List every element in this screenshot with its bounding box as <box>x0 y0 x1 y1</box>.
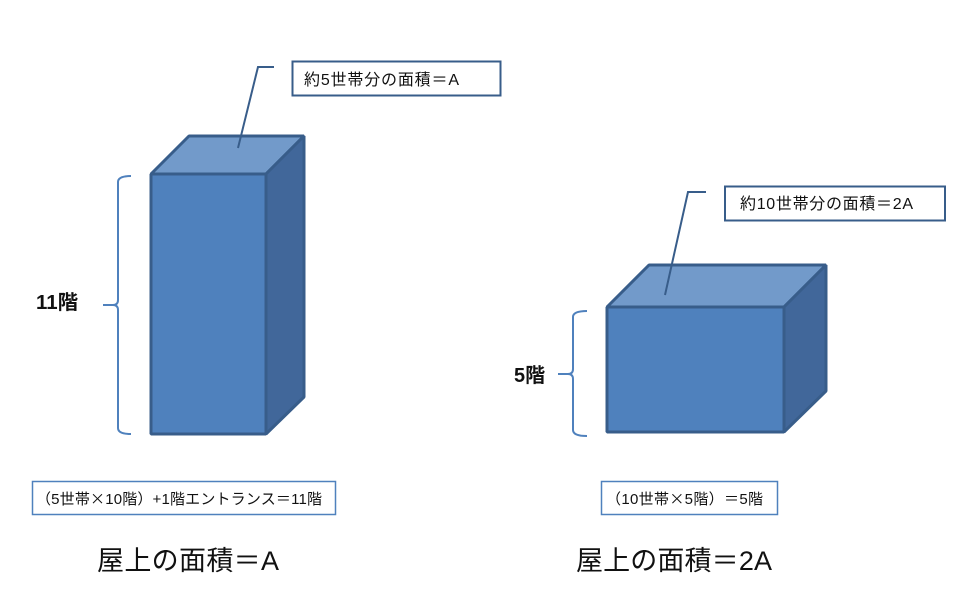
leader line: low building roof <box>665 192 706 295</box>
brace: 5 floors <box>558 311 587 436</box>
brace: 11 floors <box>103 176 131 434</box>
callout: tall building roof area: 約5世帯分の面積＝A <box>304 71 459 89</box>
formula: tall building <box>32 482 336 514</box>
heading: tall building roof area: 屋上の面積＝A <box>97 546 279 576</box>
tall building side <box>266 136 304 434</box>
tall building roof <box>151 136 304 174</box>
label: 5 floors: 5階 <box>514 364 545 387</box>
callout: low building roof area: 約10世帯分の面積＝2A <box>740 195 913 213</box>
label: 11 floors: 11階 <box>36 291 78 314</box>
callout: low building roof area <box>725 186 945 220</box>
low building side <box>784 265 826 432</box>
heading: low building roof area: 屋上の面積＝2A <box>576 546 772 576</box>
callout: tall building roof area <box>292 62 500 96</box>
leader line: tall building roof <box>238 67 274 148</box>
tall building front <box>151 174 266 434</box>
panel: tall building <box>151 136 304 434</box>
formula: tall building: （5世帯×10階）+1階エントランス＝11階 <box>36 488 322 509</box>
low building front <box>607 307 784 432</box>
formula: low building: （10世帯×5階）＝5階 <box>606 488 763 509</box>
formula: low building <box>602 482 778 514</box>
panel: low building <box>607 265 826 432</box>
low building roof <box>607 265 826 307</box>
